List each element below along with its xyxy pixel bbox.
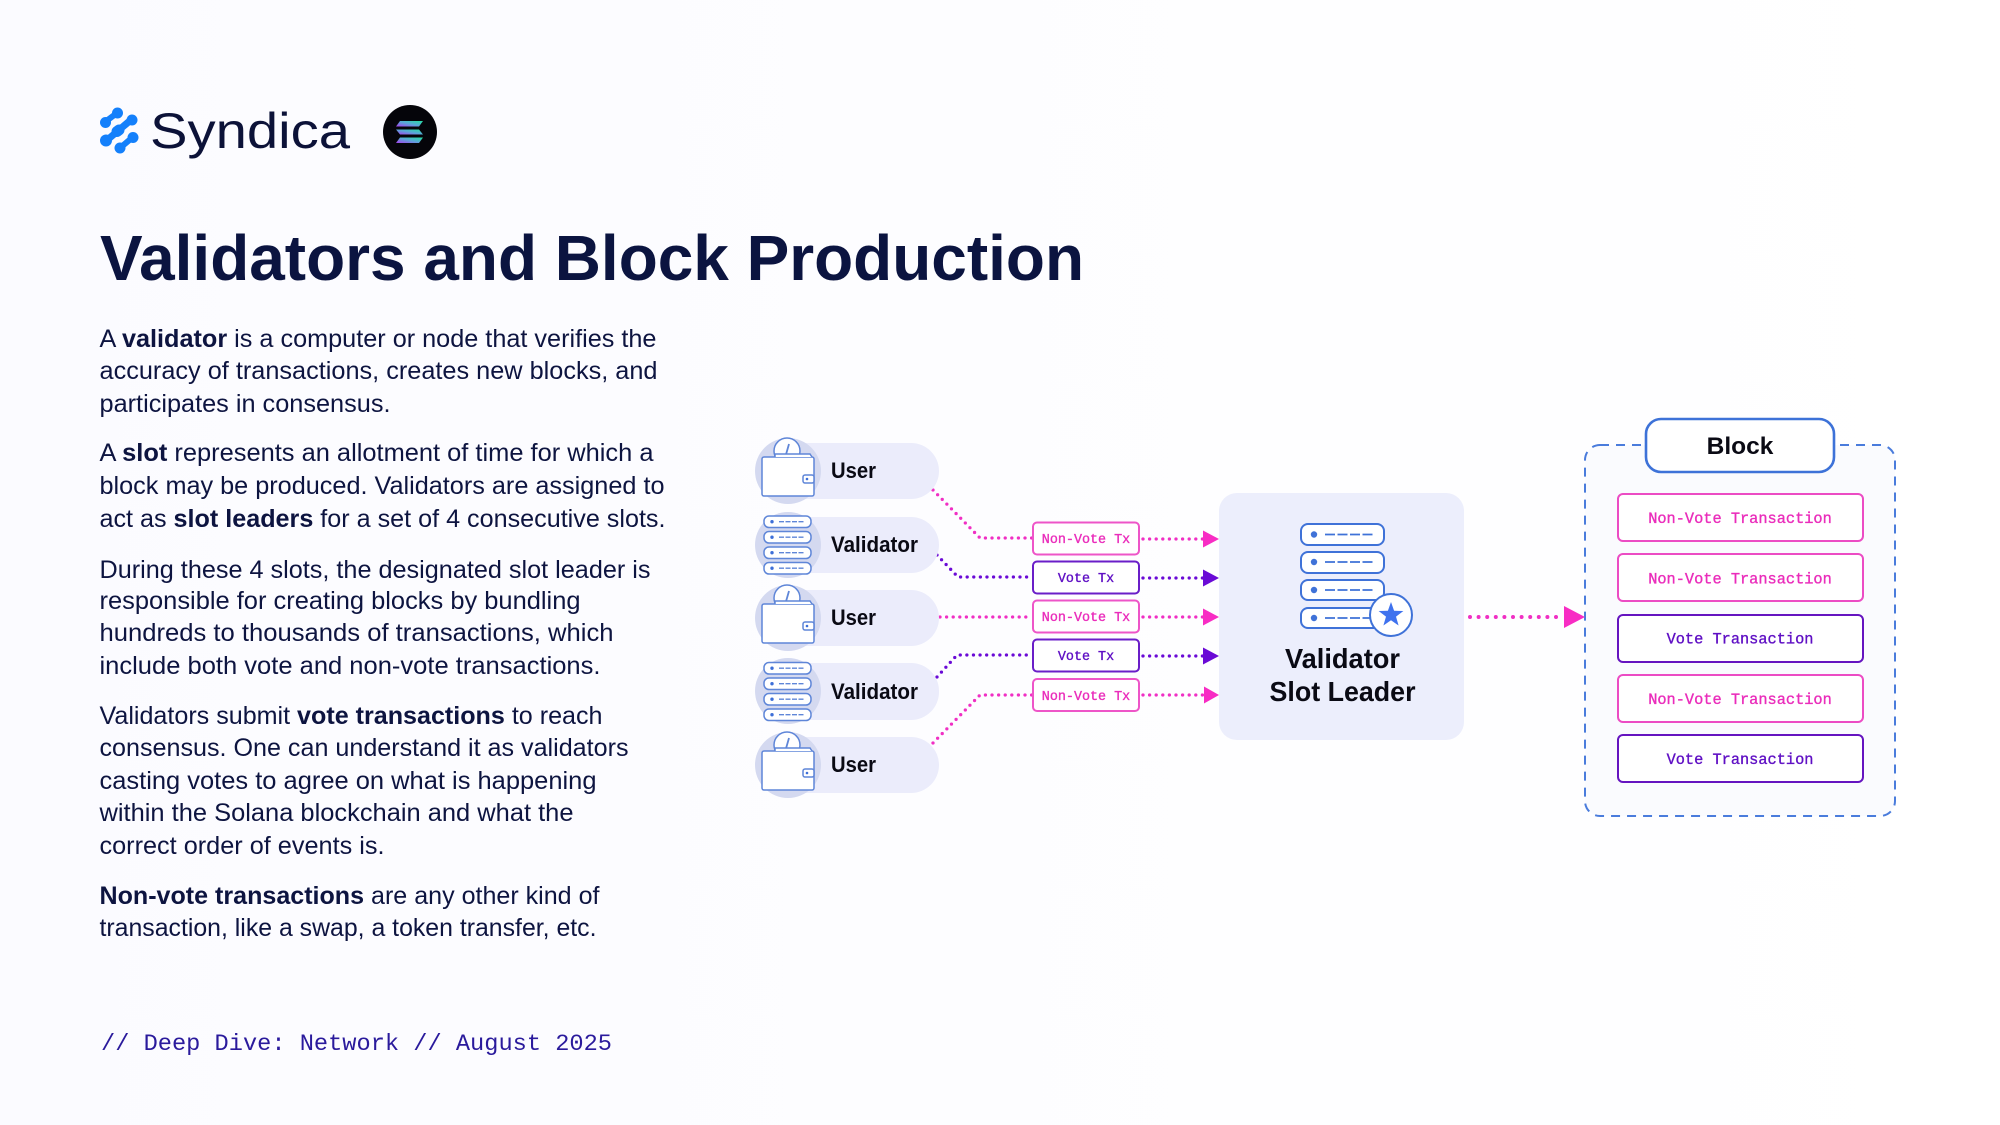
footer tag: // Deep Dive: Network // August 2025 (101, 1031, 612, 1058)
paragraph: vote transactions: within the Solana blockchain and what the (98, 799, 574, 827)
transaction chip: Non-Vote Tx 3 (1033, 679, 1139, 711)
paragraph: non-vote transactions: transaction, like a swap, a token transfer, etc. (100, 914, 596, 942)
paragraph: non-vote transactions: Non-vote transactions are any other kind of (100, 882, 600, 910)
row: Vote Transaction: Vote Transaction (1667, 630, 1813, 648)
label: User (831, 752, 876, 777)
paragraph: slot: block may be produced. Validators are assigned to (100, 472, 664, 500)
transaction chip: Vote Tx 2: Vote Tx (1058, 650, 1114, 665)
label: Validator (831, 532, 918, 557)
row: Non-Vote Transaction (1618, 675, 1863, 722)
label: Slot Leader (1270, 676, 1416, 707)
paragraph: validator: participates in consensus. (100, 390, 390, 418)
panel: block (1585, 419, 1895, 816)
paragraph: slot (100, 439, 666, 533)
paragraph: vote transactions: Validators submit vote transactions to reach (100, 702, 602, 730)
transaction chip: Vote Tx 1 (1033, 562, 1139, 594)
paragraph: slot duties: hundreds to thousands of transactions, which (100, 619, 614, 647)
label: User (831, 458, 876, 483)
paragraph: validator: accuracy of transactions, creates new blocks, and (100, 357, 658, 385)
transaction chip: Non-Vote Tx 2: Non-Vote Tx (1042, 611, 1130, 626)
paragraph: slot: A slot represents an allotment of time for which a (100, 439, 654, 467)
row: Non-Vote Transaction (1618, 554, 1863, 601)
paragraph: validator: A validator is a computer or node that verifies the (100, 325, 656, 353)
transaction chip: Non-Vote Tx 2 (1033, 600, 1139, 632)
icon: server stack (764, 662, 811, 720)
paragraph: slot duties: include both vote and non-vote transactions. (100, 652, 600, 680)
pill: Validator 2 (755, 658, 939, 724)
row: Non-Vote Transaction: Non-Vote Transaction (1648, 510, 1832, 528)
arrow: slot leader to block (1470, 606, 1585, 628)
transaction chip: Non-Vote Tx 1: Non-Vote Tx (1042, 533, 1130, 548)
row: Non-Vote Transaction (1618, 494, 1863, 541)
row: Vote Transaction (1618, 735, 1863, 782)
row: Vote Transaction: Vote Transaction (1667, 751, 1813, 769)
transaction chip: Non-Vote Tx 3: Non-Vote Tx (1042, 690, 1130, 705)
icon: server stack with star (1301, 524, 1412, 636)
row: Vote Transaction (1618, 615, 1863, 662)
logo: Syndica (100, 103, 350, 159)
paragraph: slot duties (100, 556, 650, 680)
pill: Validator 1 (755, 512, 939, 578)
paragraph: non-vote transactions (100, 882, 600, 942)
text block: description (98, 325, 666, 942)
paragraph: vote transactions: correct order of events is. (100, 832, 384, 860)
paragraph: validator (100, 325, 658, 418)
wordmark: Syndica (150, 103, 350, 159)
row: Non-Vote Transaction: Non-Vote Transaction (1648, 691, 1832, 709)
paragraph: slot duties: responsible for creating blocks by bundling (100, 587, 580, 615)
transaction chip: Vote Tx 2 (1033, 640, 1139, 672)
icon: server stack (764, 516, 811, 574)
transaction chip: Non-Vote Tx 1 (1033, 522, 1139, 554)
icon: Solana badge (383, 105, 437, 159)
pill: User 2 (755, 585, 939, 651)
label: User (831, 605, 876, 630)
transaction chip: Vote Tx 1: Vote Tx (1058, 572, 1114, 587)
icon: wallet (762, 732, 814, 790)
paragraph: vote transactions: casting votes to agree on what is happening (100, 767, 596, 795)
title: Validators and Block Production (100, 222, 1084, 294)
label: Validator (1285, 643, 1400, 674)
icon: Syndica mark (100, 108, 138, 154)
label: Validator (831, 679, 918, 704)
icon: wallet (762, 585, 814, 643)
icon: wallet (762, 438, 814, 496)
pill: User 1 (755, 438, 939, 504)
label (1270, 643, 1416, 707)
paragraph: vote transactions (98, 702, 628, 860)
panel: validator slot leader (1219, 493, 1464, 740)
heading: Block (1646, 419, 1834, 472)
connector lines: senders to transactions (933, 490, 1032, 743)
row: Non-Vote Transaction: Non-Vote Transaction (1648, 570, 1832, 588)
heading: Block: Block (1707, 433, 1774, 460)
pill: User 3 (755, 732, 939, 798)
arrows: transactions to slot leader (1143, 530, 1219, 704)
paragraph: slot duties: During these 4 slots, the designated slot leader is (100, 556, 650, 584)
paragraph: vote transactions: consensus. One can understand it as validators (100, 734, 628, 762)
paragraph: slot: act as slot leaders for a set of 4 consecutive slots. (100, 505, 666, 533)
